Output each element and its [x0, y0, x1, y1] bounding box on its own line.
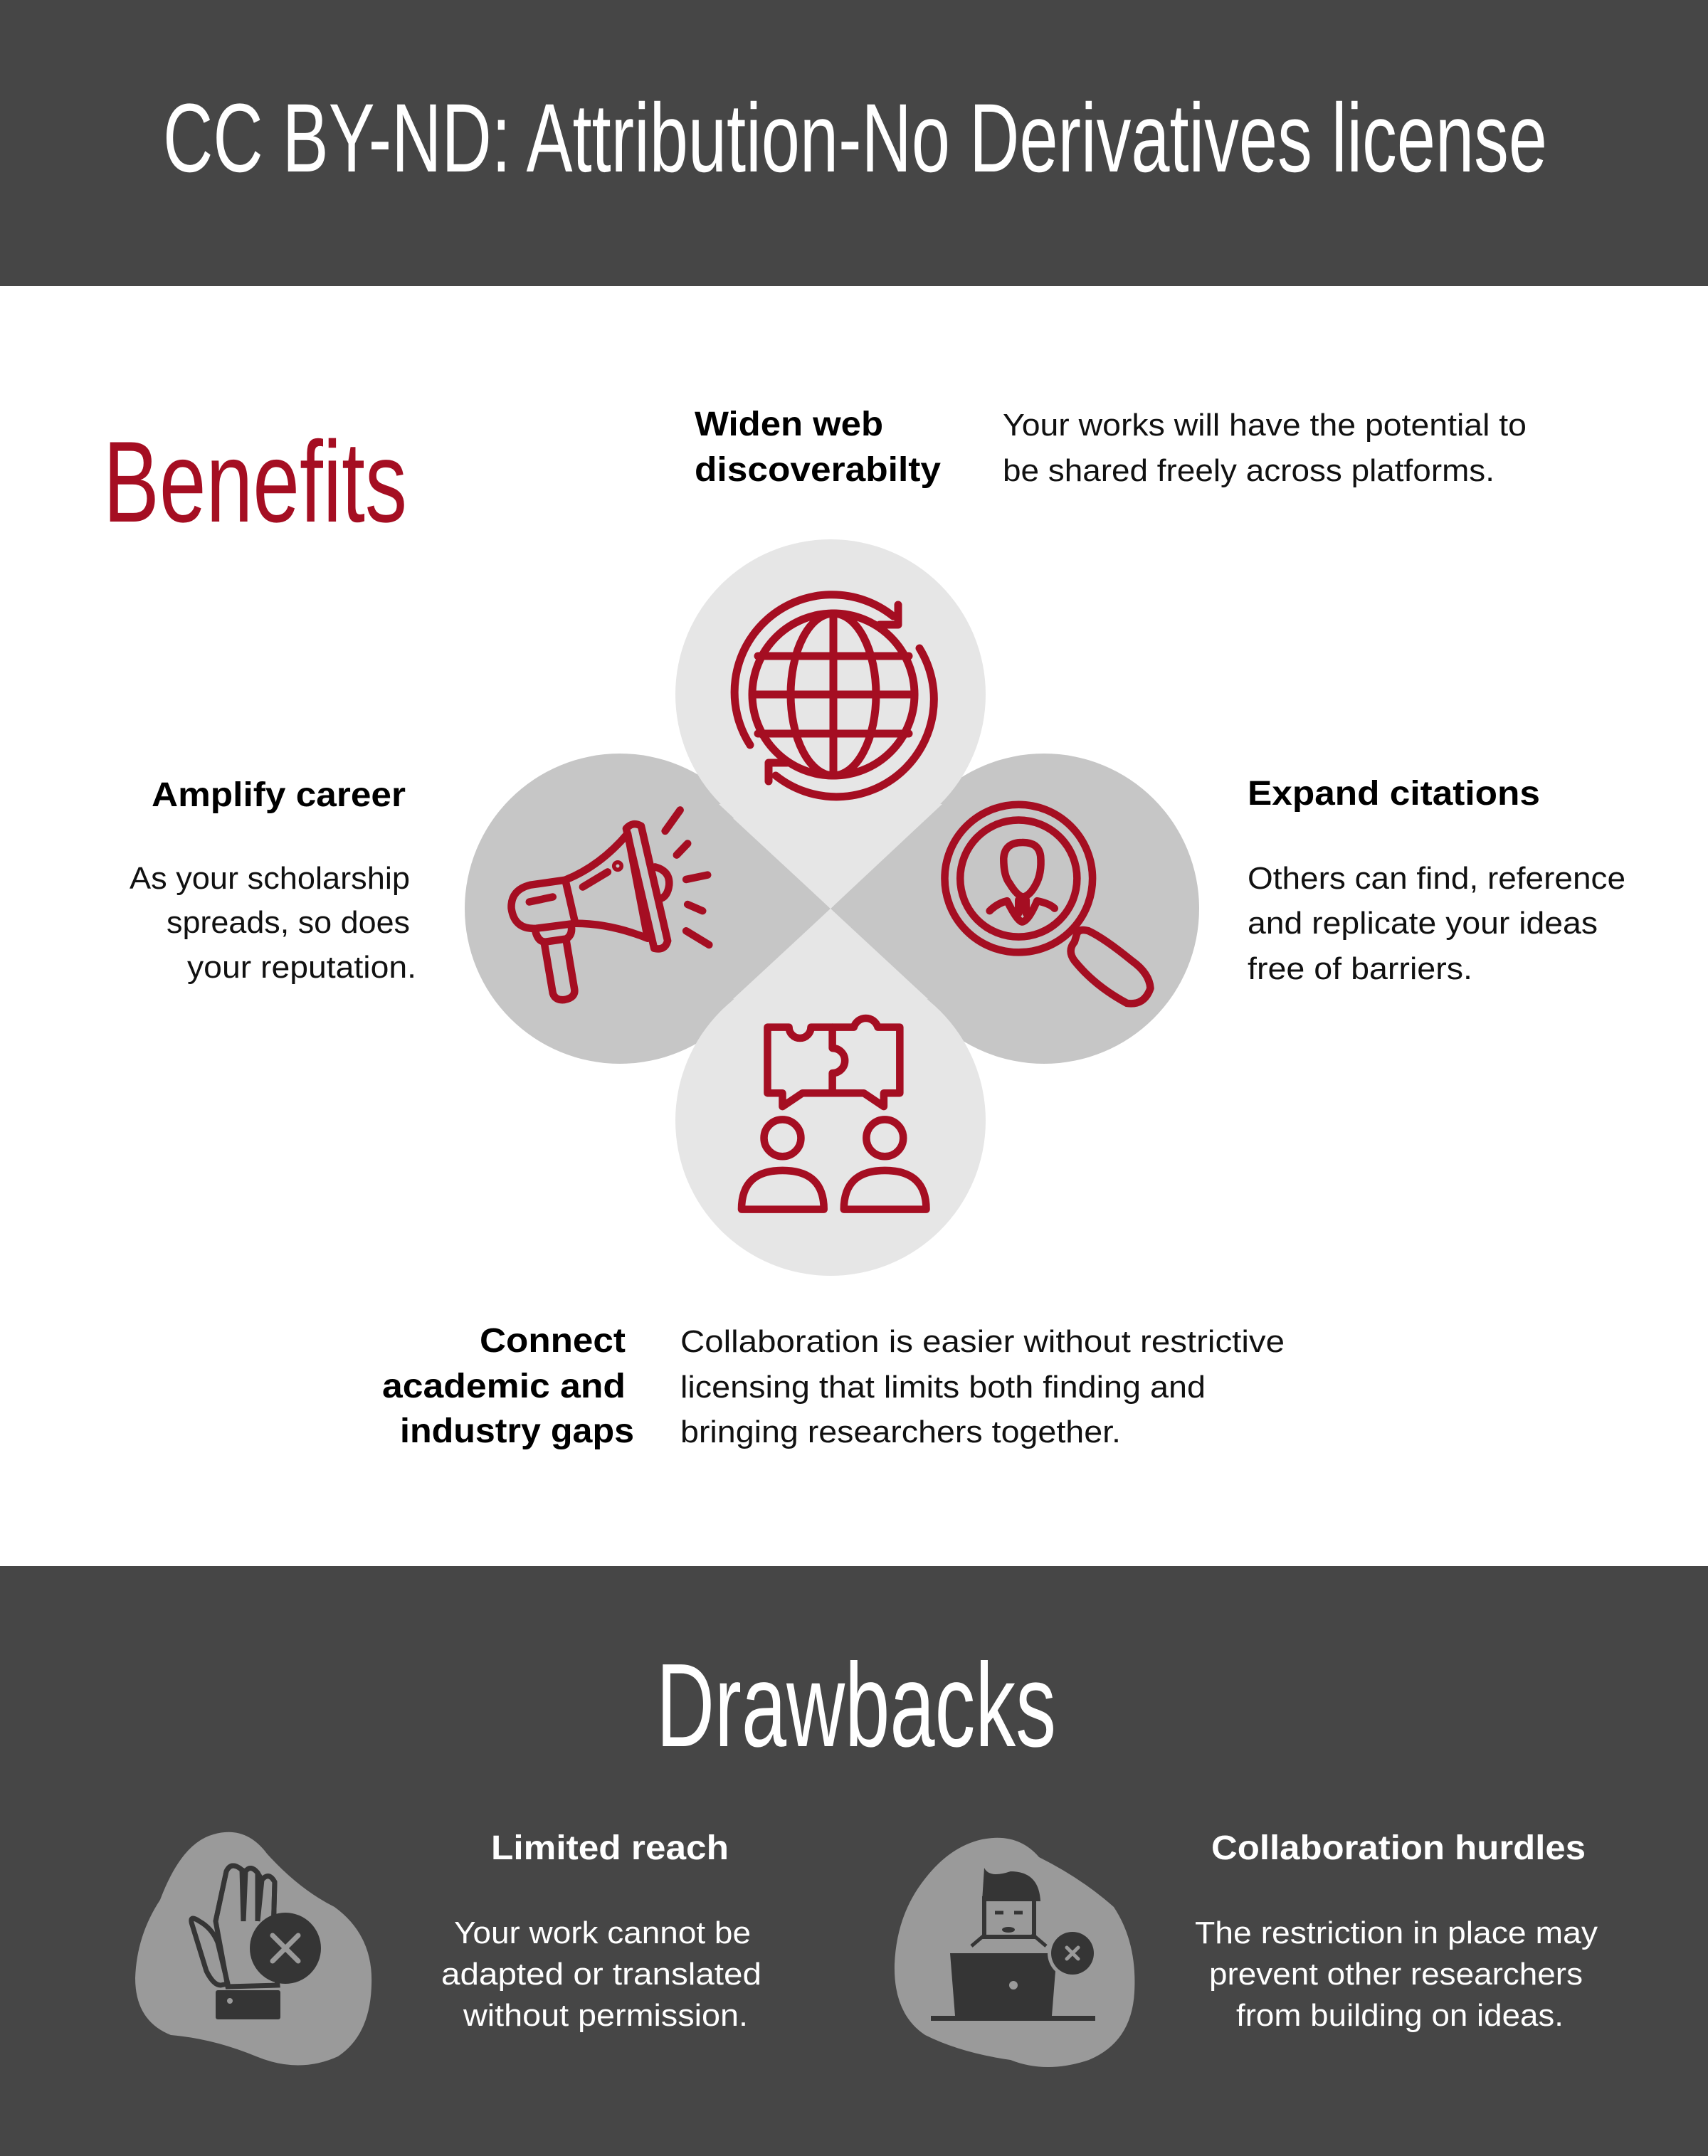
header band [0, 0, 1708, 286]
text block: collaboration hurdles: Collaboration hurdles [1211, 1829, 1586, 1867]
text block: expand citations: Others can find, reference [1248, 861, 1625, 896]
text block: limited reach: adapted or translated [441, 1957, 761, 1992]
text block: collaboration hurdles: from building on ideas. [1236, 1998, 1564, 2033]
panel: drawbacks [0, 1566, 1708, 2156]
text block: connect academic and industry gaps: industry gaps [400, 1412, 634, 1450]
icon: megaphone [512, 810, 709, 1000]
text block: connect academic and industry gaps: licensing that limits both finding and [680, 1370, 1206, 1405]
icon: globe [734, 595, 934, 797]
icon: person at laptop blob [895, 1838, 1134, 2067]
icon: puzzle bubbles and people [742, 1018, 927, 1210]
text block: connect academic and industry gaps: academic and [382, 1368, 626, 1405]
clover diagram [465, 539, 1199, 1276]
text block: connect academic and industry gaps: bringing researchers together. [680, 1415, 1121, 1449]
text block: widen web discoverability: Your works will have the potential to [1003, 408, 1527, 443]
text block: limited reach [441, 1829, 761, 2033]
text block: amplify career: your reputation. [187, 950, 416, 985]
text block: collaboration hurdles: prevent other researchers [1209, 1957, 1583, 1992]
text block: widen web discoverability: be shared freely across platforms. [1003, 453, 1494, 488]
text block: expand citations: and replicate your ideas [1248, 906, 1598, 941]
text block: widen web discoverability [695, 406, 1527, 489]
drawbacks heading: Drawbacks [656, 1639, 1056, 1772]
text block: amplify career: Amplify career [152, 776, 406, 814]
text block: widen web discoverability: discoverabilty [695, 451, 941, 489]
icon: hand blob [135, 1832, 371, 2065]
text block: connect academic and industry gaps [382, 1322, 1285, 1450]
text block: connect academic and industry gaps: Connect [480, 1322, 626, 1360]
text block: limited reach: Your work cannot be [454, 1915, 751, 1950]
text block: amplify career: As your scholarship [130, 861, 410, 896]
text block: limited reach: Limited reach [491, 1829, 729, 1867]
icon: magnifier with person [944, 805, 1150, 1003]
text block: amplify career [130, 776, 416, 985]
text block: amplify career: spreads, so does [167, 905, 410, 940]
text block: collaboration hurdles: The restriction in place may [1195, 1915, 1598, 1950]
text block: expand citations [1248, 775, 1625, 986]
text block: collaboration hurdles [1195, 1829, 1598, 2033]
text block: connect academic and industry gaps: Collaboration is easier without restrictive [680, 1324, 1285, 1359]
text block: expand citations: Expand citations [1248, 775, 1540, 813]
benefits heading: Benefits [103, 418, 407, 546]
text block: limited reach: without permission. [463, 1998, 748, 2033]
text block: widen web discoverability: Widen web [695, 406, 883, 443]
text block: expand citations: free of barriers. [1248, 951, 1472, 986]
